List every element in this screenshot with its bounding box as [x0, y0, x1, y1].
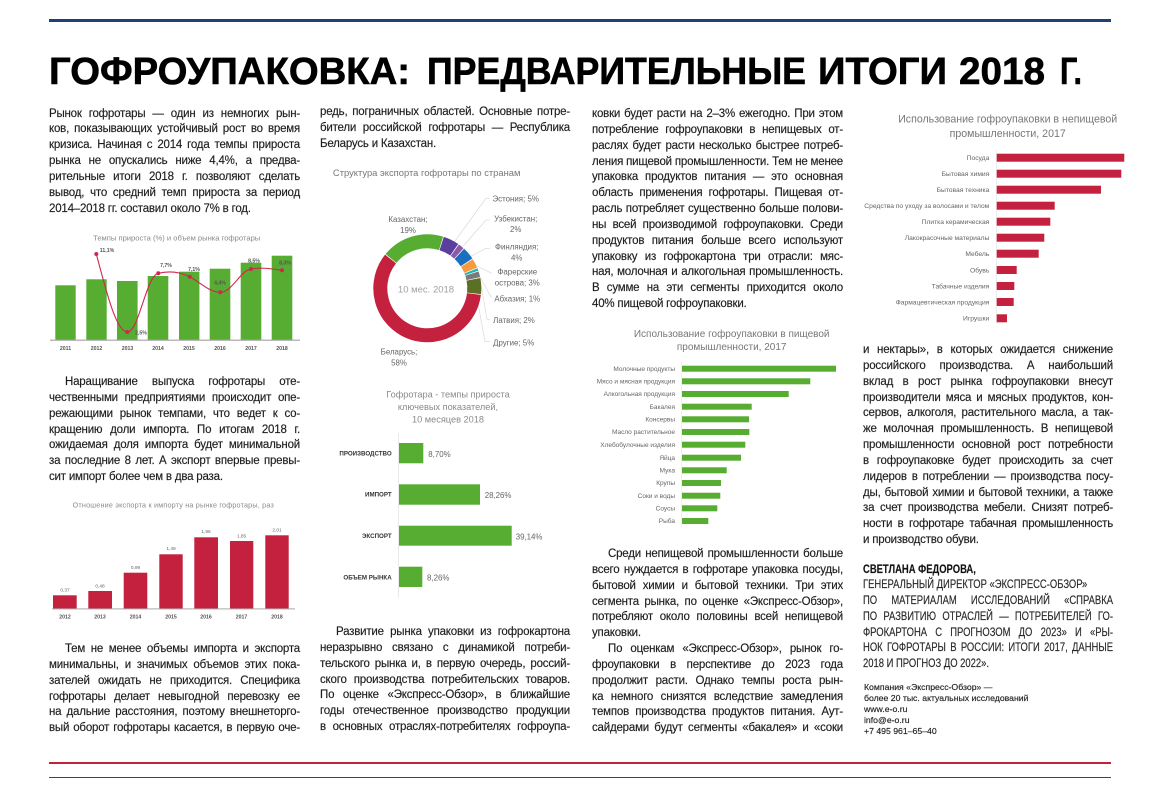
bottom red rule	[49, 762, 1111, 764]
text block: column four: ды, бытовой химии и бытовой техники, а также	[863, 487, 1113, 499]
chart: market growth and volume: 2016	[214, 346, 226, 352]
text block: column three top: 40% пищевой гофроупаковки.	[592, 298, 747, 310]
text block: market forecast: темпов производства продуктов питания. Аут-	[592, 706, 843, 718]
text block: import and export volumes: зателей ожидать не приходится. Специфика	[49, 675, 300, 687]
text block: packaging market development: годы отечественное производство продукции	[320, 705, 570, 717]
chart: non-food industry usage: Игрушки	[963, 316, 990, 323]
chart: export structure donut: 2%	[510, 225, 521, 234]
text block: column four: российского производства. А наибольший	[863, 360, 1113, 372]
chart: export to import ratio: 2014	[130, 615, 141, 621]
chart: food industry usage: Молочные продукты	[613, 366, 675, 373]
chart: export structure donut: Беларусь;	[381, 348, 417, 357]
text block: output growth: ожидаемая доля импорта будет минимальной	[49, 439, 300, 451]
text block: packaging market development: неразрывно связано с динамикой потреби-	[320, 642, 570, 654]
text block: column three top: продуктов питания больше всего используют	[592, 235, 843, 247]
chart: market growth and volume: 7,1%	[188, 267, 200, 273]
chart: export to import ratio: 1,85	[237, 534, 246, 540]
chart: export structure donut: 4%	[511, 254, 522, 262]
chart: export structure donut: 19%	[400, 226, 416, 235]
text block: column three top: потребление гофроупаковки в непищевых от-	[592, 124, 843, 136]
chart: key indicators growth: 8,70%	[428, 450, 451, 459]
chart: export to import ratio: 0,48	[95, 584, 105, 590]
chart: non-food industry usage: Бытовая химия	[942, 171, 990, 178]
chart: food industry usage: Соки и воды	[638, 493, 675, 500]
text block: import and export volumes: на дальние расстояния, поэтому внешнеторго-	[49, 706, 300, 718]
text block: packaging market development	[320, 626, 570, 733]
chart: market growth and volume: 7,7%	[160, 263, 172, 269]
text block: output growth: кращению доли импорта. По итогам 2018 г.	[49, 424, 300, 436]
chart: export to import ratio: 0,99	[131, 565, 140, 571]
chart: export to import ratio: 2,01	[272, 528, 282, 534]
chart: key indicators growth: 28,26%	[485, 491, 511, 500]
company contacts	[864, 682, 1029, 736]
chart: market growth and volume: 2011	[60, 346, 71, 352]
chart: export to import ratio: 2013	[94, 615, 106, 621]
text block: output growth: Наращивание выпуска гофротары оте-	[65, 376, 300, 388]
text block: intro: Рынок гофротары — один из немногих рын-	[49, 108, 300, 120]
chart: non-food industry usage	[864, 114, 1124, 324]
chart: food industry usage: Использование гофроупаковки в пищевой	[634, 328, 830, 340]
author credit	[863, 562, 1114, 670]
author credit: ФРОКАРТОНА С ПРОГНОЗОМ ДО 2023» И «РЫ-	[863, 624, 1113, 638]
text block: non-food demand: Среди непищевой промышленности больше	[608, 548, 843, 560]
chart: food industry usage	[597, 328, 836, 527]
chart: export to import ratio: 0,37	[60, 588, 70, 594]
chart: export structure donut	[333, 167, 540, 368]
top rule	[49, 19, 1111, 22]
text block: packaging market development: тельского рынка и, в первую очередь, россий-	[320, 658, 570, 670]
chart: export structure donut: Другие; 5%	[493, 339, 534, 348]
text block: non-food demand	[592, 548, 844, 639]
text block: column four: за счет производства мебели. Снизят потреб-	[863, 502, 1113, 514]
text block: column three top: упаковку из гофрокартона три отрасли: мяс-	[592, 251, 843, 263]
chart: key indicators growth: 10 месяцев 2018	[412, 414, 484, 424]
chart: market growth and volume: Темпы прироста (%) и объем рынка гофротары	[93, 234, 260, 242]
text block: intro	[49, 108, 300, 215]
text block: column three top: ления пищевой промышленности. Тем не менее	[592, 156, 843, 168]
text block: column three top: раслях будет расти несколько быстрее потреб-	[592, 140, 843, 152]
chart: non-food industry usage: Лакокрасочные материалы	[905, 235, 989, 242]
text block: column two top: редь, пограничных областей. Основные потре-	[320, 106, 570, 118]
chart: non-food industry usage: промышленности, 2017	[950, 128, 1066, 140]
chart: export structure donut: Абхазия; 1%	[494, 294, 540, 304]
chart: market growth and volume: 2015	[183, 346, 195, 352]
title	[49, 51, 1082, 93]
chart: non-food industry usage: Использование гофроупаковки в непищевой	[898, 114, 1117, 126]
chart: non-food industry usage: Обувь	[970, 266, 990, 274]
chart: export structure donut: 10 мес. 2018	[398, 284, 454, 296]
chart: food industry usage: Консервы	[645, 416, 675, 424]
text block: output growth: сит импорт более чем в два раза.	[49, 471, 223, 483]
text block: non-food demand: бытовой химии и бытовой техники. Три этих	[592, 580, 843, 592]
chart: food industry usage: Масло растительное	[612, 429, 675, 436]
text block: intro: ков, показывающих устойчивый рост во время	[49, 123, 300, 135]
text block: non-food demand: потребляют около половины всей непищевой	[592, 611, 843, 623]
chart: key indicators growth: ключевых показателей,	[398, 402, 498, 412]
company contacts: www.e-o.ru	[864, 704, 907, 714]
text block: column three top	[592, 108, 843, 310]
chart: key indicators growth: 8,26%	[427, 574, 449, 582]
chart: non-food industry usage: Средства по уходу за волосами и телом	[864, 203, 990, 210]
chart: market growth and volume: 8,5%	[248, 258, 260, 264]
text block: column four: сервов, алкоголя, растительного масла, а так-	[863, 407, 1113, 419]
chart: export to import ratio: 1,49	[166, 546, 176, 552]
chart: key indicators growth: ЭКСПОРТ	[362, 533, 392, 540]
title: ГОФРОУПАКОВКА:	[49, 51, 410, 93]
text block: column four: ности в гофротаре табачная промышленность	[863, 518, 1113, 530]
text block: column four	[863, 344, 1113, 546]
chart: non-food industry usage: Посуда	[967, 155, 990, 162]
text block: market forecast: ка немного снизятся вследствие замедления	[592, 691, 843, 703]
chart: export to import ratio: 2012	[59, 615, 71, 621]
text block: column four: лидеров в потреблении — производства посу-	[863, 471, 1113, 483]
chart: key indicators growth: ПРОИЗВОДСТВО	[339, 451, 392, 458]
company contacts: более 20 тыс. актуальных исследований	[864, 693, 1029, 703]
bottom dark rule	[49, 777, 1111, 778]
chart: market growth and volume: 11,1%	[100, 248, 115, 254]
text block: column three top: упаковка продуктов питания — это основная	[592, 171, 843, 183]
chart: key indicators growth: ИМПОРТ	[365, 491, 392, 498]
chart: market growth and volume: 2018	[276, 346, 288, 352]
chart: key indicators growth: ОБЪЕМ РЫНКА	[343, 574, 392, 581]
text block: column two top: Беларусь и Казахстан.	[320, 138, 436, 150]
chart: food industry usage: Яйца	[659, 454, 675, 462]
chart: export structure donut: Структура экспорта гофротары по странам	[333, 167, 520, 178]
chart: food industry usage: Хлебобулочные изделия	[600, 441, 675, 449]
chart: market growth and volume: 4,4%	[214, 280, 226, 286]
chart: key indicators growth: Гофротара - темпы прироста	[386, 390, 511, 400]
text block: column three top: В сумме на эти сегменты приходится около	[592, 282, 843, 294]
chart: export structure donut: Казахстан;	[388, 215, 428, 224]
chart: food industry usage: Алкогольная продукция	[604, 391, 675, 398]
text block: market forecast: продолжит расти. Однако темпы роста рын-	[592, 675, 843, 687]
chart: market growth and volume: 2,5%	[135, 330, 147, 336]
text block: import and export volumes: вый оборот гофротары касается, в первую оче-	[49, 722, 300, 734]
chart: export to import ratio: Отношение экспорта к импорту на рынке гофротары, раз	[73, 500, 274, 510]
chart: market growth and volume: 2014	[152, 346, 164, 352]
title: 2018	[959, 51, 1045, 93]
chart: market growth and volume: 2012	[91, 346, 102, 352]
chart: market growth and volume	[50, 234, 300, 352]
chart: export to import ratio: 2017	[236, 615, 247, 621]
text block: column two top: бители российской гофротары — Республика	[320, 122, 570, 134]
chart: food industry usage: Крупы	[656, 480, 675, 487]
chart: export to import ratio: 1,96	[201, 529, 211, 535]
text block: column three top: ная, молочная и алкогольная промышленность.	[592, 266, 843, 278]
chart: export structure donut: острова; 3%	[495, 278, 540, 288]
text block: packaging market development: По оценке «Экспресс-Обзор», в ближайшие	[320, 689, 570, 701]
text block: column two top	[320, 106, 570, 150]
chart: market growth and volume: 8,3%	[279, 260, 291, 266]
chart: export structure donut: Узбекистан;	[494, 214, 537, 224]
text block: column four: и нектары», в которых ожидается снижение	[863, 344, 1113, 356]
company contacts: +7 495 961–65–40	[864, 726, 937, 736]
chart: food industry usage: Бакалея	[650, 404, 675, 411]
title: ИТОГИ	[818, 51, 947, 93]
company contacts: info@e-o.ru	[864, 715, 910, 725]
text block: import and export volumes: Тем не менее объемы импорта и экспорта	[65, 643, 300, 655]
chart: food industry usage: Рыба	[659, 517, 675, 525]
chart: export to import ratio	[52, 500, 295, 621]
author credit: ПО МАТЕРИАЛАМ ИССЛЕДОВАНИЙ «СПРАВКА	[863, 593, 1113, 607]
title: ПРЕДВАРИТЕЛЬНЫЕ	[427, 51, 806, 93]
chart: export to import ratio: 2015	[165, 615, 177, 621]
text block: column four: же молочная промышленность. В непищевой	[863, 423, 1113, 435]
text block: output growth	[49, 376, 300, 483]
chart: non-food industry usage: Табачные изделия	[932, 282, 990, 290]
text block: column three top: расль потребляет существенно больше полови-	[592, 203, 843, 215]
chart: food industry usage: Соусы	[656, 506, 675, 512]
chart: food industry usage: Мука	[660, 468, 675, 474]
text block: output growth: чественными предприятиями происходит опе-	[49, 392, 300, 404]
chart: non-food industry usage: Фармацевтическая продукция	[896, 299, 990, 306]
author credit: ПО РАЗВИТИЮ ОТРАСЛЕЙ — ПОТРЕБИТЕЛЕЙ ГО-	[863, 609, 1113, 623]
text block: import and export volumes: гофротары делает невыгодной перевозку ее	[49, 691, 300, 703]
text block: column four: производители мяса и мясных продуктов, кон-	[863, 392, 1113, 404]
chart: market growth and volume: 2013	[122, 346, 133, 352]
text block: market forecast: По оценкам «Экспресс-Обзор», рынок го-	[608, 643, 843, 655]
chart: export structure donut: Фарерские	[497, 268, 538, 276]
text block: packaging market development: Развитие рынка упаковки из гофрокартона	[336, 626, 570, 638]
text block: output growth: за последние 8 лет. А экспорт впервые превы-	[49, 455, 300, 467]
chart: key indicators growth	[339, 390, 542, 598]
chart: market growth and volume: 2017	[245, 346, 257, 352]
chart: export to import ratio: 2016	[200, 615, 212, 621]
chart: non-food industry usage: Мебель	[965, 250, 990, 258]
text block: non-food demand: всего нуждается в гофротаре упаковка посуды,	[592, 564, 843, 576]
text block: column three top: область применения гофротары. Пищевая от-	[592, 187, 843, 199]
chart: export to import ratio: 2018	[271, 615, 283, 621]
text block: intro: вывод, что средний темп прироста за период	[49, 187, 300, 199]
text block: column four: вклад в рост рынка гофроупаковки внесут	[863, 376, 1113, 388]
text block: intro: 2014–2018 гг. составил около 7% в год.	[49, 203, 251, 215]
title: Г.	[1060, 51, 1082, 93]
chart: export structure donut: Латвия; 2%	[493, 316, 535, 325]
text block: import and export volumes	[49, 642, 300, 734]
company contacts: Компания «Экспресс-Обзор» —	[864, 682, 992, 692]
text block: column three top: ковки будет расти на 2–3% ежегодно. При этом	[592, 108, 843, 120]
chart: export structure donut: Эстония; 5%	[493, 194, 539, 204]
text block: non-food demand: сегмента рынка, по оценке «Экспресс-Обзор»,	[592, 596, 843, 608]
text block: output growth: режающими рынок темпами, что ведет к со-	[49, 408, 300, 420]
author credit: 2018 И ПРОГНОЗ ДО 2022».	[863, 656, 989, 670]
chart: export structure donut: 58%	[391, 359, 407, 368]
text block: packaging market development: в основных отраслях-потребителях гофроупа-	[320, 721, 570, 733]
text block: intro: рынка не опускались ниже 4,4%, а предва-	[49, 155, 300, 167]
author credit: НОК ГОФРОТАРЫ В РОССИИ: ИТОГИ 2017, ДАННЫЕ	[863, 640, 1113, 654]
text block: column four: в гофроупаковке будет происходить за счет	[863, 455, 1113, 467]
chart: food industry usage: Мясо и мясная продукция	[597, 378, 675, 386]
author credit: ГЕНЕРАЛЬНЫЙ ДИРЕКТОР «ЭКСПРЕСС-ОБЗОР»	[863, 577, 1087, 591]
chart: export structure donut: Финляндия;	[495, 243, 538, 252]
chart: non-food industry usage: Бытовая техника	[937, 187, 990, 194]
text block: market forecast: фроупаковки в перспективе до 2023 года	[592, 659, 843, 671]
chart: key indicators growth: 39,14%	[516, 532, 542, 542]
text block: intro: рительные итоги 2018 г. позволяют сделать	[49, 171, 300, 183]
text block: column four: промышленности основной рост потребности	[863, 439, 1113, 451]
text block: import and export volumes: минимальны, и значимых объемов этих пока-	[49, 659, 300, 671]
chart: food industry usage: промышленности, 2017	[677, 342, 787, 353]
text block: market forecast	[592, 642, 844, 734]
chart: non-food industry usage: Плитка керамическая	[922, 219, 990, 226]
text block: packaging market development: ского производства потребительских товаров.	[320, 674, 570, 686]
author credit: СВЕТЛАНА ФЕДОРОВА,	[863, 562, 976, 576]
text block: non-food demand: упаковки.	[592, 627, 641, 639]
text block: market forecast: сайдерами будут сегменты «бакалея» и «соки	[592, 722, 843, 734]
text block: intro: кризиса. Начиная с 2014 года темпы прироста	[49, 139, 300, 151]
text block: column three top: ны всей производимой гофроупаковки. Среди	[592, 219, 843, 231]
text block: column four: и производство обуви.	[863, 534, 979, 546]
